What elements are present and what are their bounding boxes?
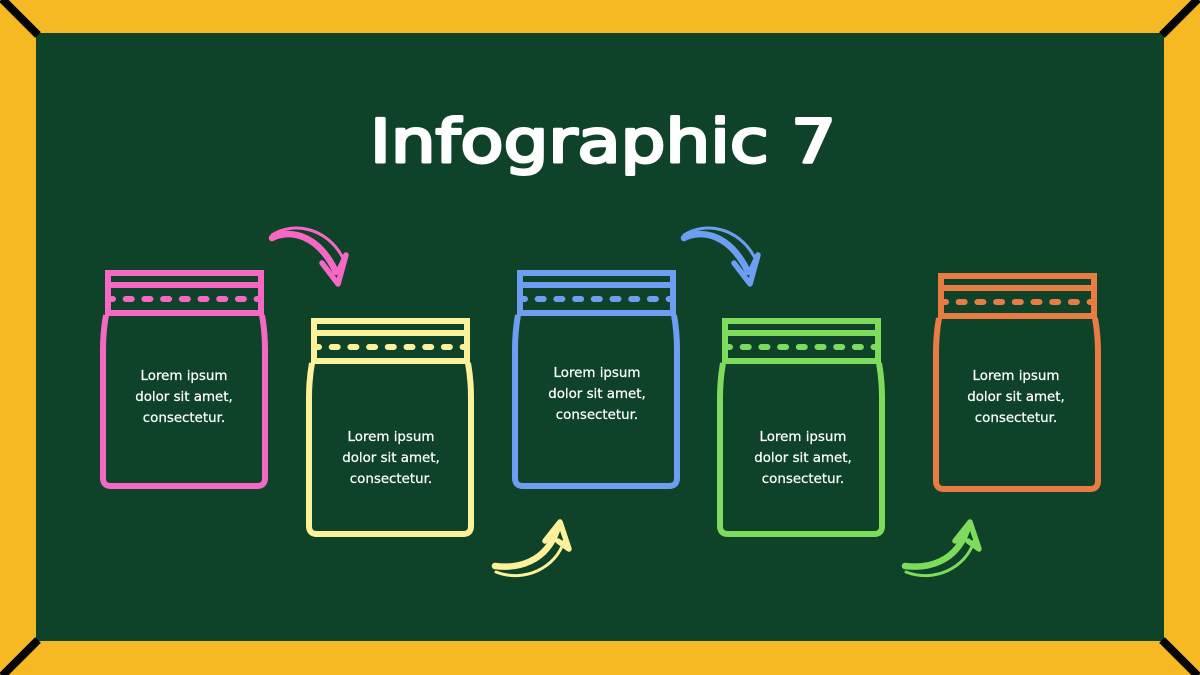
arrow: yellow to blue: [495, 522, 569, 576]
jar 2 text: dolor sit amet,: [342, 451, 440, 466]
jar 1 lid: [105, 273, 264, 313]
jar 3 lid: [517, 273, 676, 313]
title: Infographic 7: [370, 107, 836, 177]
jar 3 text: [548, 366, 646, 423]
jar 2 text: consectetur.: [350, 472, 432, 487]
arrow: pink to yellow: [272, 228, 346, 284]
jar 2 body: [309, 363, 471, 534]
jar 3 text: dolor sit amet,: [548, 387, 646, 402]
jar 1 text: consectetur.: [143, 411, 225, 426]
jar 4 lid: [722, 321, 881, 361]
jar 4 text: Lorem ipsum: [760, 430, 846, 445]
jar 2: yellow: [309, 321, 471, 534]
jar 4 body: [720, 363, 882, 534]
jar 4 text: consectetur.: [762, 472, 844, 487]
jar 4 text: dolor sit amet,: [754, 451, 852, 466]
jar 5 text: Lorem ipsum: [973, 369, 1059, 384]
jar 2 lid: [311, 321, 470, 361]
jar 3 text: consectetur.: [556, 408, 638, 423]
jar 1 text: [135, 369, 233, 426]
jar 5 text: consectetur.: [975, 411, 1057, 426]
jar 5 text: [967, 369, 1065, 426]
jar 3: blue: [515, 273, 677, 486]
arrow: blue to green: [684, 228, 758, 284]
jar 5 lid: [938, 276, 1097, 316]
jar 3 body: [515, 315, 677, 486]
jar 1 text: Lorem ipsum: [141, 369, 227, 384]
jar 4 text: [754, 430, 852, 487]
jar 2 text: Lorem ipsum: [348, 430, 434, 445]
jar 5 body: [936, 318, 1098, 489]
jar 3 text: Lorem ipsum: [554, 366, 640, 381]
jar 5 text: dolor sit amet,: [967, 390, 1065, 405]
jar 3 stitching: [519, 296, 674, 302]
jar 1 body: [103, 315, 265, 486]
jar 1: pink: [103, 273, 265, 486]
arrow: green to orange: [905, 522, 979, 576]
jar 5: orange: [936, 276, 1098, 489]
jar 2 stitching: [313, 344, 468, 350]
jar 1 text: dolor sit amet,: [135, 390, 233, 405]
jar 5 stitching: [940, 299, 1095, 305]
jar 4 stitching: [724, 344, 879, 350]
jar 2 text: [342, 430, 440, 487]
jar 4: green: [720, 321, 882, 534]
jar 1 stitching: [107, 296, 262, 302]
